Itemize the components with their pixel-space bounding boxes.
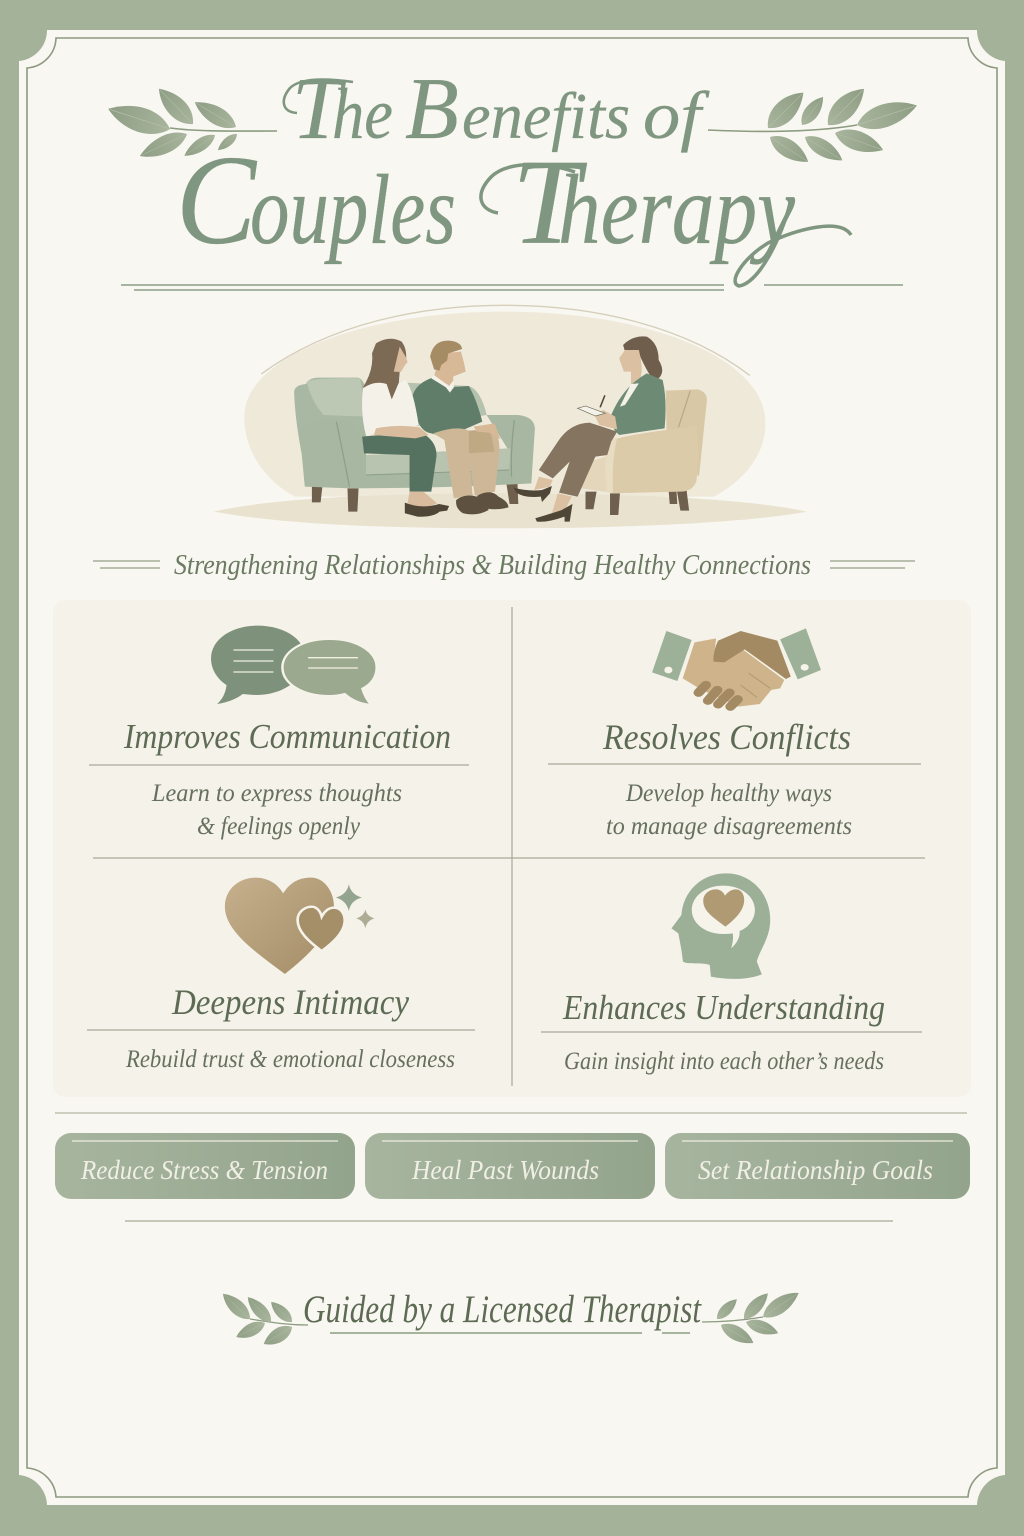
- description: Learn to express thoughts: [151, 780, 402, 807]
- title double rule: [121, 285, 903, 290]
- icon: head with heart: [671, 873, 770, 979]
- benefit: deepens intimacy: [87, 878, 475, 1073]
- title: T: [292, 61, 347, 158]
- pill: heal past wounds: [365, 1133, 655, 1199]
- title: C: [176, 129, 258, 271]
- floor shadow: [214, 493, 807, 528]
- man: [412, 341, 508, 514]
- title: of: [643, 77, 710, 153]
- divider above pills: [55, 1112, 967, 1114]
- description: [606, 780, 852, 840]
- heading: Deepens Intimacy: [171, 982, 409, 1022]
- pill: heal past wounds: Heal Past Wounds: [411, 1155, 599, 1185]
- therapist chair: [582, 389, 707, 515]
- description: Gain insight into each other’s needs: [564, 1048, 884, 1075]
- benefit: resolves conflicts: [548, 628, 921, 840]
- footer: [218, 1286, 803, 1350]
- sofa: [294, 378, 535, 512]
- title: herapy: [558, 154, 796, 265]
- description: Develop healthy ways: [625, 780, 832, 807]
- pill: reduce stress: [55, 1133, 355, 1199]
- pill: reduce stress: Reduce Stress & Tension: [80, 1155, 328, 1185]
- subtitle with flanking rules: Strengthening Relationships & Building Healthy Connections: [174, 550, 811, 581]
- title: ouples: [250, 154, 456, 265]
- footer: Guided by a Licensed Therapist: [303, 1288, 702, 1331]
- title: [176, 61, 851, 286]
- divider below pills: [125, 1220, 893, 1222]
- description: [151, 780, 402, 840]
- title: enefits: [462, 80, 630, 153]
- heading: Resolves Conflicts: [602, 717, 851, 757]
- pill: set relationship goals: [665, 1133, 970, 1199]
- benefits panel: [53, 600, 971, 1097]
- title leaf branch left: [104, 82, 277, 164]
- title: B: [405, 61, 459, 158]
- benefit: improves communication: [89, 626, 469, 840]
- backdrop oval: [244, 312, 765, 497]
- description: & feelings openly: [197, 813, 361, 840]
- heading: Improves Communication: [123, 717, 451, 756]
- description: to manage disagreements: [606, 813, 852, 840]
- woman: [362, 339, 449, 517]
- footer leaf branch left: [218, 1289, 308, 1350]
- description: Rebuild trust & emotional closeness: [125, 1046, 455, 1073]
- pill: set relationship goals: Set Relationship Goals: [698, 1155, 933, 1185]
- icon: handshake: [652, 628, 821, 707]
- heading: Enhances Understanding: [562, 988, 885, 1027]
- title: T: [512, 135, 588, 270]
- title: he: [332, 74, 393, 154]
- therapist: [514, 336, 666, 522]
- illustration: therapy session: [214, 305, 807, 528]
- footer leaf branch right: [702, 1286, 803, 1349]
- arc line: [261, 305, 750, 375]
- benefit: enhances understanding: [541, 873, 922, 1075]
- icon: hearts and sparkles: [225, 878, 375, 974]
- title leaf branch right: [708, 81, 920, 169]
- icon: speech bubbles: [211, 626, 377, 705]
